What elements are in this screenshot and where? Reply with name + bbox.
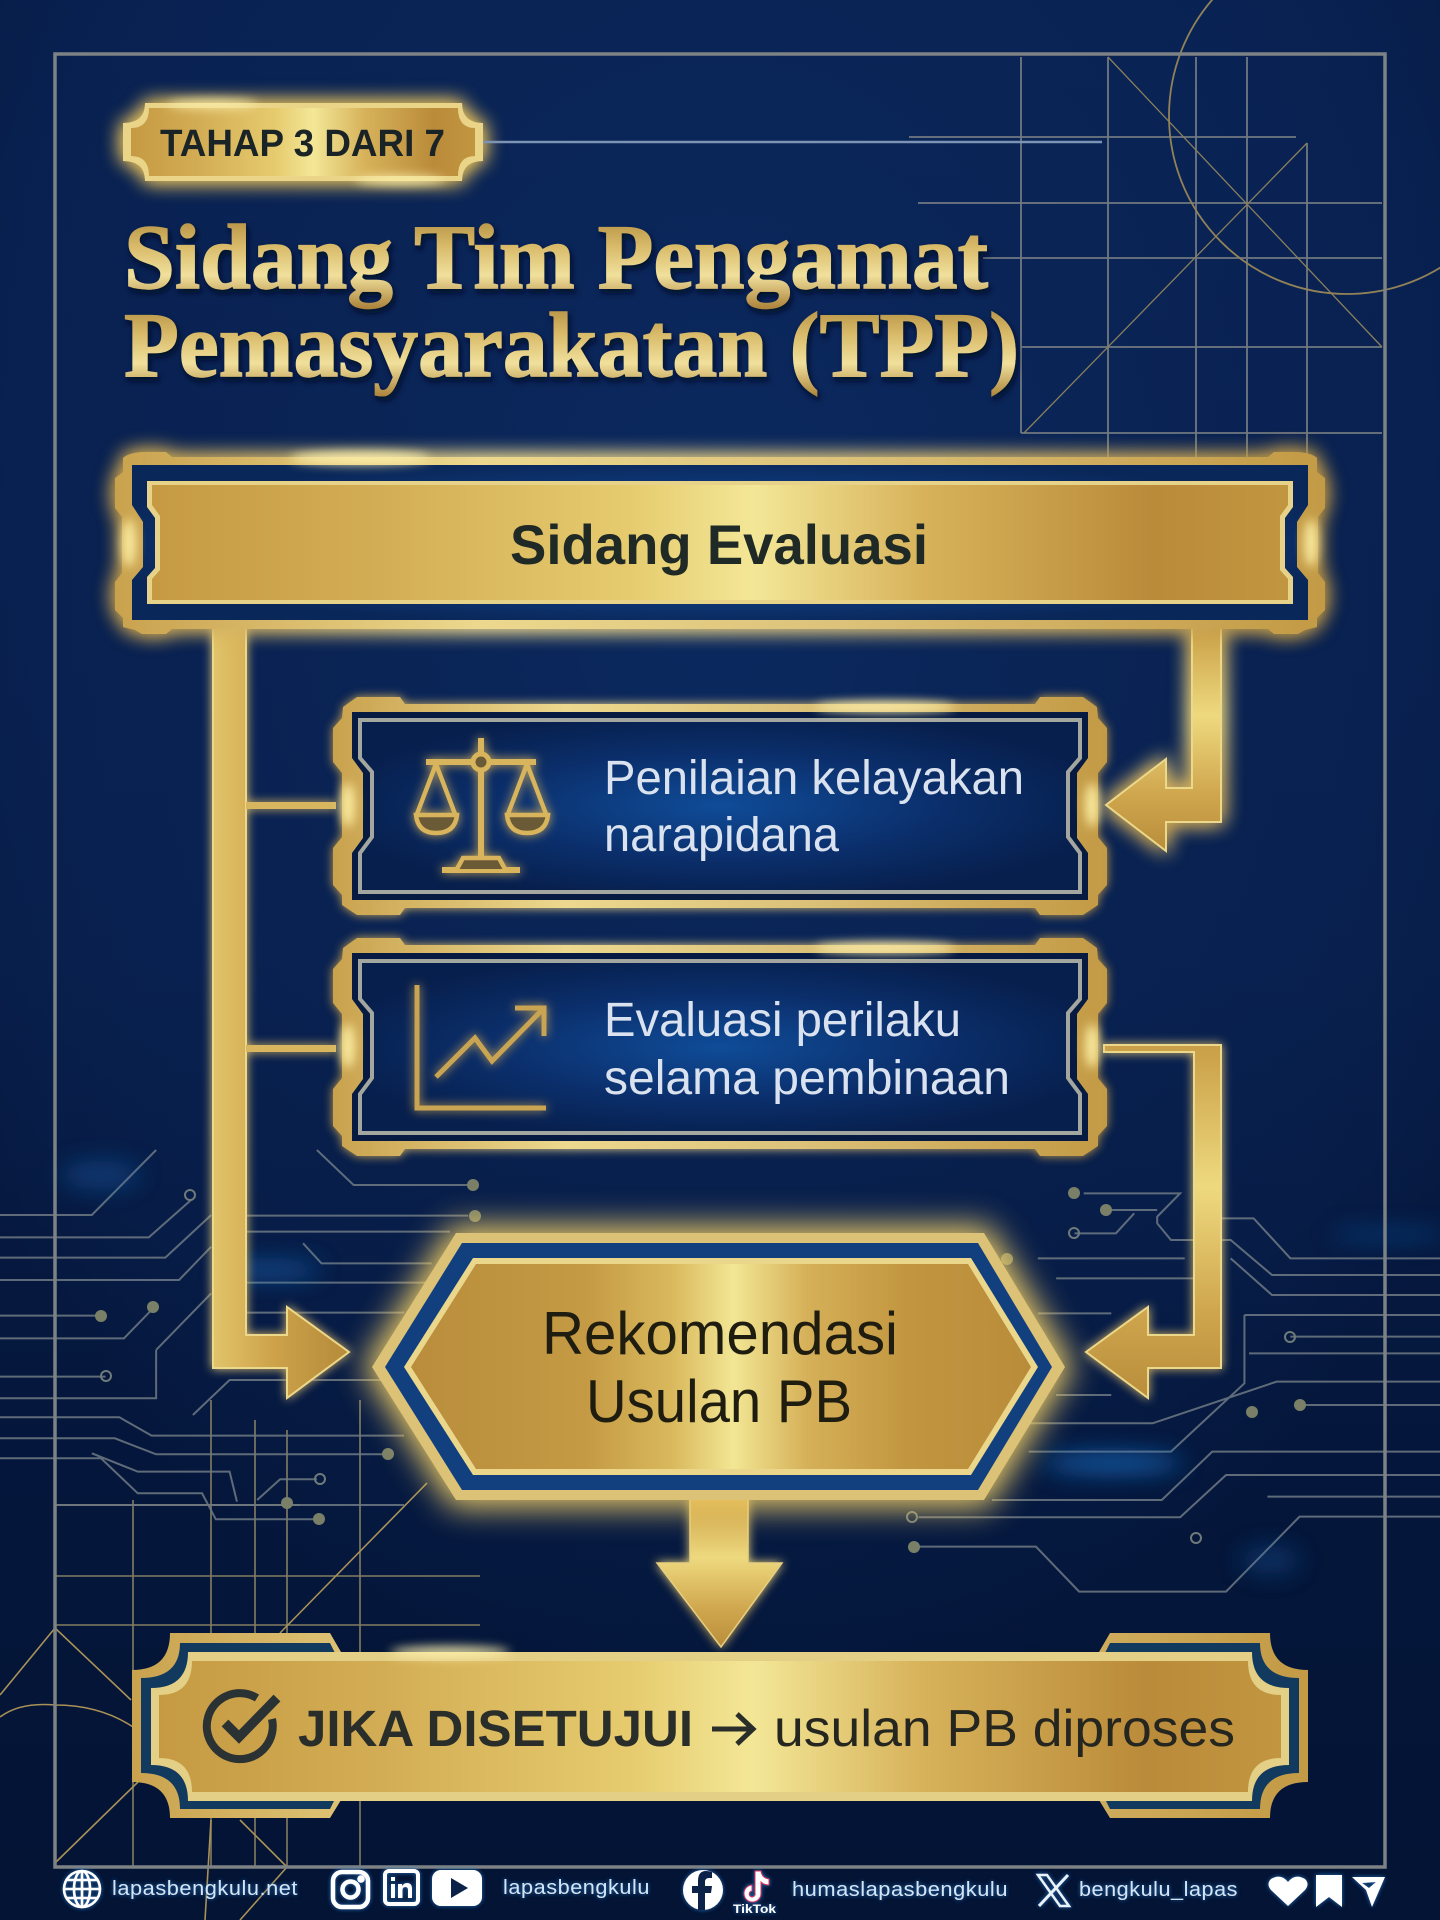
header panel: Sidang Evaluasi — [115, 451, 1325, 634]
website text: lapasbengkulu.net — [112, 1878, 298, 1900]
decorative geometric grid bottom left — [0, 1400, 480, 1920]
badge label: TAHAP 3 DARI 7 — [160, 123, 445, 165]
icon: tiktok — [733, 1871, 776, 1916]
result text bold: JIKA DISETUJUI — [298, 1700, 693, 1757]
panel: Rekomendasi hexagon: Usulan PB — [586, 1368, 852, 1435]
decorative geometric grid top right — [909, 0, 1440, 457]
decorative blue light spots — [60, 1161, 1440, 1574]
icon: instagram — [333, 1872, 368, 1907]
step badge — [123, 99, 483, 185]
title: Pemasyarakatan (TPP) — [124, 294, 1019, 396]
icon: scales — [416, 738, 548, 870]
title: Sidang Tim Pengamat — [124, 206, 988, 308]
icon: x — [1038, 1875, 1069, 1906]
icon: growth chart — [417, 985, 546, 1108]
icon: heart — [1268, 1877, 1308, 1906]
panel: JIKA DISETUJUI result — [132, 1633, 1308, 1818]
tiktok handle: humaslapasbengkulu — [792, 1879, 1008, 1901]
connector: right arrow into first card — [1106, 625, 1221, 851]
card text: Evaluasi perilaku — [604, 994, 961, 1047]
panel: Rekomendasi hexagon — [372, 1233, 1065, 1500]
icon: bookmark — [1316, 1875, 1342, 1907]
icon: tiktok: TikTok — [733, 1902, 776, 1916]
hexagon text: Rekomendasi — [542, 1300, 898, 1367]
footer social bar — [64, 1870, 1385, 1916]
panel: Evaluasi perilaku selama pembinaan: selama pembinaan — [604, 1052, 1010, 1105]
card text: Penilaian kelayakan — [604, 752, 1024, 805]
decorative circuit traces left — [0, 1150, 481, 1525]
connector: left main arrow — [213, 625, 349, 1398]
icon: check circle — [207, 1693, 277, 1759]
arrow glyph — [712, 1714, 753, 1744]
icon: globe — [64, 1871, 100, 1907]
result text regular: usulan PB diproses — [774, 1700, 1235, 1758]
down arrow — [657, 1498, 782, 1647]
icon: send — [1352, 1877, 1385, 1907]
youtube instagram handle: lapasbengkulu — [503, 1877, 650, 1899]
header label: Sidang Evaluasi — [510, 513, 928, 576]
icon: linkedin — [385, 1871, 418, 1904]
panel: Penilaian kelayakan narapidana: narapidana — [604, 809, 839, 862]
connector: second card to recommendation arrow — [1086, 1045, 1221, 1398]
icon: facebook — [683, 1870, 723, 1910]
x handle: bengkulu_lapas — [1079, 1879, 1238, 1901]
panel: Penilaian kelayakan narapidana — [333, 697, 1107, 915]
title — [124, 206, 1019, 396]
panel: Evaluasi perilaku selama pembinaan — [333, 938, 1107, 1156]
icon: youtube — [432, 1870, 482, 1906]
decorative circuit traces right — [907, 1187, 1440, 1592]
